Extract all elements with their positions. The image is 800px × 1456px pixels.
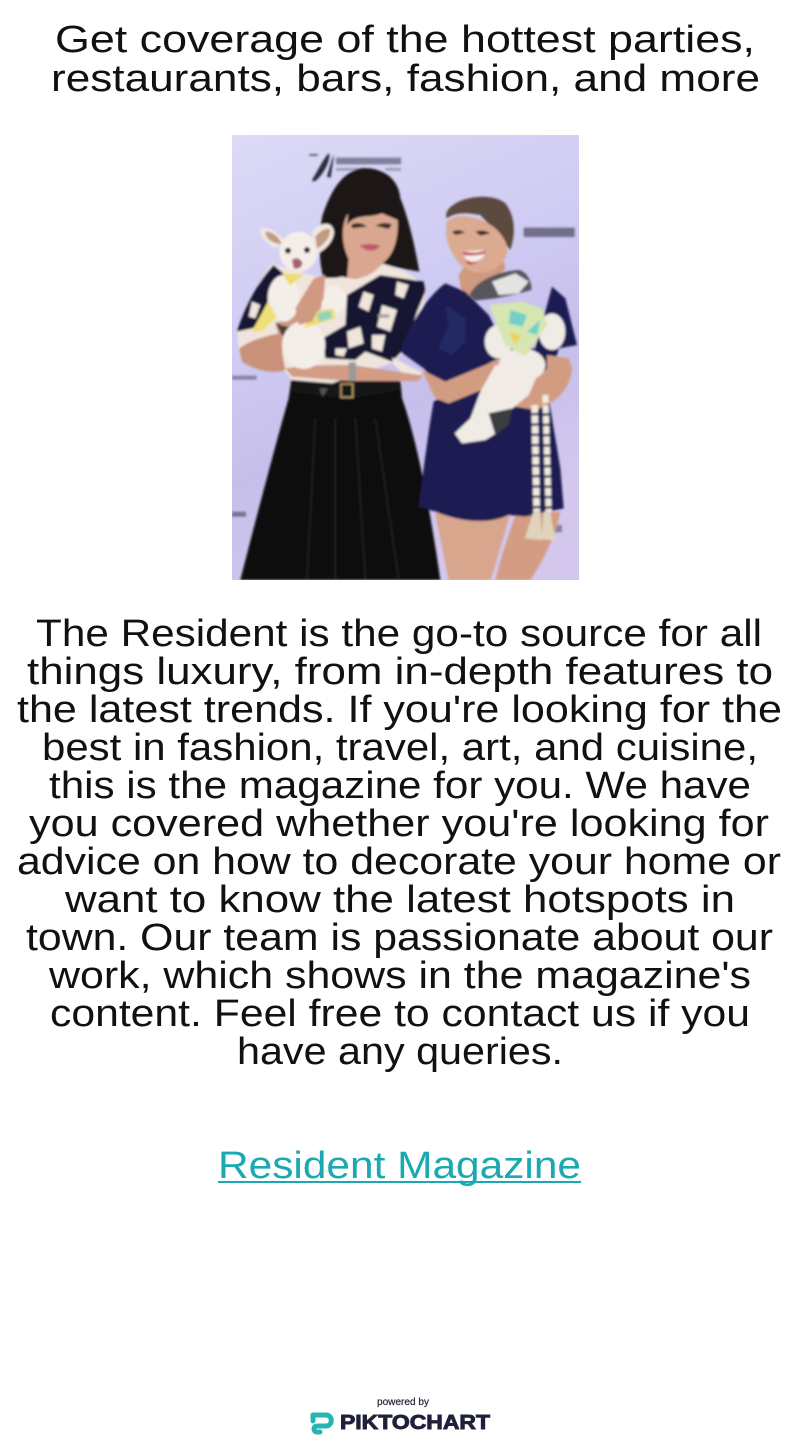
- left woman arms: [239, 330, 292, 372]
- right woman legs: [435, 512, 510, 580]
- title: [51, 19, 760, 100]
- body paragraph: town. Our team is passionate about our: [26, 917, 773, 959]
- title: Get coverage of the hottest parties,: [55, 19, 755, 61]
- body paragraph: best in fashion, travel, art, and cuisine,: [42, 727, 758, 769]
- body paragraph: content. Feel free to contact us if you: [50, 993, 750, 1035]
- body paragraph: this is the magazine for you. We have: [49, 765, 751, 807]
- left dog: [268, 232, 346, 369]
- icon: Piktochart mark: [313, 1415, 331, 1432]
- left woman skirt: [240, 380, 440, 580]
- footer: powered by Piktochart logo: PIKTOCHART: [340, 1412, 490, 1434]
- left woman top: [237, 263, 426, 383]
- right woman rope belt and tassels: [535, 405, 537, 512]
- body paragraph: The Resident is the go-to source for all: [36, 613, 762, 655]
- body paragraph: advice on how to decorate your home or: [17, 841, 781, 883]
- right woman dress: [400, 283, 577, 521]
- right dog: [455, 313, 565, 443]
- left woman face and neck: [343, 208, 398, 278]
- body paragraph: want to know the latest hotspots in: [64, 879, 735, 921]
- body paragraph: you covered whether you're looking for: [29, 803, 769, 845]
- body paragraph: work, which shows in the magazine's: [48, 955, 751, 997]
- title: restaurants, bars, fashion, and more: [51, 58, 760, 100]
- body paragraph: the latest trends. If you're looking for the: [17, 689, 782, 731]
- body paragraph: [17, 613, 782, 1073]
- backdrop logos: [312, 153, 334, 182]
- photo: two women holding small dogs: [232, 135, 579, 580]
- footer: powered by Piktochart logo: powered by: [377, 1397, 429, 1408]
- body paragraph: have any queries.: [237, 1031, 563, 1073]
- left woman hand on dog: [295, 275, 325, 325]
- body paragraph: things luxury, from in-depth features to: [27, 651, 773, 693]
- right woman arms: [422, 358, 512, 403]
- right woman neck and face: [459, 255, 505, 295]
- footer: powered by Piktochart logo: [310, 1397, 490, 1434]
- link: Resident Magazine: Resident Magazine: [218, 1145, 581, 1187]
- left woman hair: [320, 168, 419, 292]
